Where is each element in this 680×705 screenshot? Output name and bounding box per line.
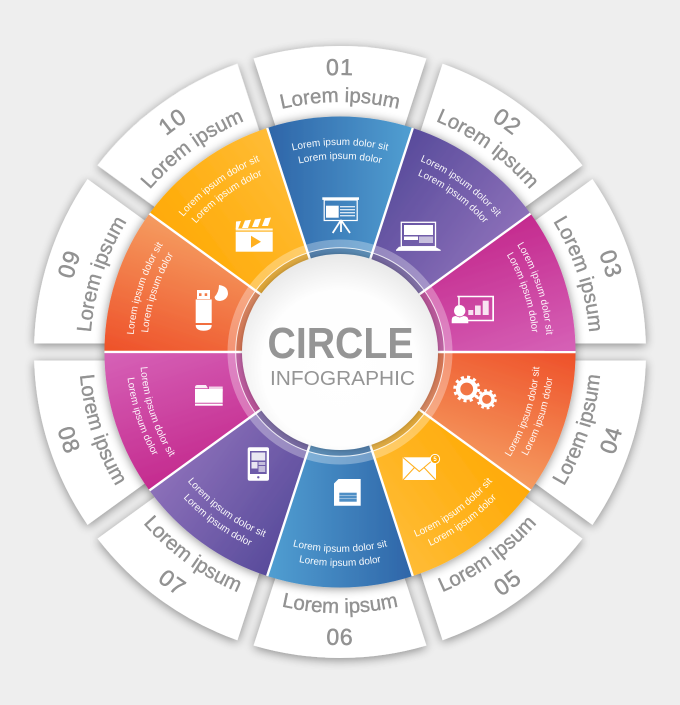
icon: gears	[455, 377, 495, 408]
icon: USB stick	[196, 285, 228, 331]
tab label 01: 01	[326, 58, 352, 76]
tab label 10: Lorem ipsum	[140, 112, 244, 188]
tab label 05: Lorem ipsum	[438, 518, 536, 592]
tab label 07: 07	[160, 570, 186, 593]
tab label 09	[58, 218, 126, 331]
tab label 01: Lorem ipsum	[280, 87, 399, 109]
tab label 06: 06	[327, 628, 352, 646]
title: CIRCLE: CIRCLE	[268, 319, 414, 368]
wedge text 08: Lorem ipsum dolor sit	[140, 367, 175, 457]
wedge text 09: Lorem ipsum dolor sit	[126, 242, 163, 334]
wedge text 06: Lorem ipsum dolor	[300, 555, 380, 568]
wedge text 08: Lorem ipsum dolor	[128, 378, 158, 454]
tab label 10: 10	[160, 110, 185, 136]
wedge text 07: Lorem ipsum dolor	[184, 494, 252, 546]
colour wheel	[93, 116, 587, 588]
centre hub	[242, 254, 438, 450]
subtitle: INFOGRAPHIC: INFOGRAPHIC	[270, 368, 415, 390]
tab label 04	[552, 375, 622, 485]
wedge text 06: Lorem ipsum dolor sit	[293, 540, 388, 554]
icon: envelope with badge	[403, 454, 440, 480]
icon: envelope with badge: 5	[433, 457, 437, 463]
tab label 09: Lorem ipsum	[76, 218, 126, 331]
tab label 07: Lorem ipsum	[144, 515, 240, 592]
icon: laptop	[396, 222, 441, 251]
wedge text 03: Lorem ipsum dolor sit	[518, 242, 554, 335]
wedge text 09: Lorem ipsum dolor	[141, 252, 172, 332]
tab label 04: Lorem ipsum	[552, 375, 600, 485]
wedge text 05: Lorem ipsum dolor	[428, 494, 496, 546]
tab label 05: 05	[494, 570, 520, 595]
tab label 02: Lorem ipsum	[437, 108, 536, 189]
tab label 06	[282, 592, 398, 646]
wedge text 01: Lorem ipsum dolor	[298, 152, 382, 164]
tab label 08	[58, 374, 124, 486]
icon: clapperboard	[236, 218, 273, 252]
wedge text 02: Lorem ipsum dolor sit	[420, 155, 501, 217]
icon: tablet	[248, 447, 269, 481]
wedge text 03: Lorem ipsum dolor	[507, 252, 538, 332]
tab label 03: 03	[600, 250, 622, 277]
wedge text 06	[293, 540, 388, 568]
icon: projector screen	[322, 197, 359, 233]
tab label 02: 02	[494, 109, 520, 136]
icon: memory card	[334, 479, 361, 506]
tab label 01	[280, 58, 399, 109]
wedge text 01: Lorem ipsum dolor sit	[292, 138, 388, 150]
wedge text 07: Lorem ipsum dolor sit	[188, 477, 266, 537]
wedge text 10: Lorem ipsum dolor sit	[178, 156, 260, 216]
tab label 08: Lorem ipsum	[80, 374, 124, 486]
tab label 03: Lorem ipsum	[554, 215, 600, 332]
wedge text 10: Lorem ipsum dolor	[191, 170, 261, 223]
tab label 08: 08	[58, 427, 80, 453]
wedge text 04: Lorem ipsum dolor	[521, 377, 552, 456]
wedge text 02: Lorem ipsum dolor	[418, 169, 488, 222]
tab label 09: 09	[58, 252, 80, 278]
icon: presenter with bar chart	[452, 296, 494, 323]
tab label 06: Lorem ipsum	[282, 592, 398, 618]
tab label 04: 04	[600, 428, 622, 454]
wedge text 05: Lorem ipsum dolor sit	[414, 478, 492, 537]
wedge text 04: Lorem ipsum dolor sit	[504, 366, 540, 456]
wedge text 01	[292, 138, 388, 164]
icon: folder	[195, 385, 223, 406]
